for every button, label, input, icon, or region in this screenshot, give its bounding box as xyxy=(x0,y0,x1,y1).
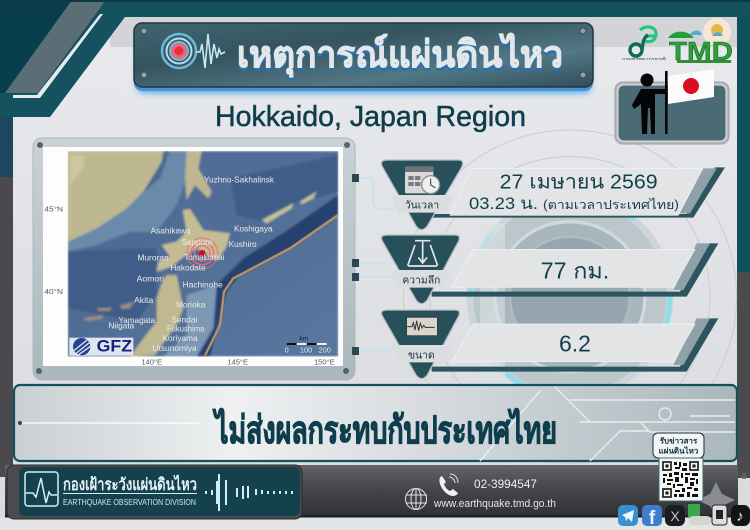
background HUD rings xyxy=(403,130,737,463)
scale bar: 200 xyxy=(319,345,331,354)
division logo xyxy=(25,472,58,506)
logo: DMR: กรมทรัพยากรธรณี xyxy=(622,56,667,61)
map image: Hachinohe xyxy=(183,279,223,289)
map image: Muroran xyxy=(137,253,169,263)
scale bar: 100 xyxy=(300,345,312,354)
website contact: www.earthquake.tmd.go.th xyxy=(433,498,556,510)
info row: date and time xyxy=(381,160,725,230)
GFZ logo: GFZ xyxy=(97,337,132,356)
logo: DMR xyxy=(622,27,667,61)
icon: Japan flag xyxy=(668,69,714,104)
map image: Morioka xyxy=(176,299,205,309)
connectors xyxy=(352,174,394,355)
map axes xyxy=(44,206,335,366)
badge xyxy=(381,310,459,379)
badge: ขนาด xyxy=(408,351,435,362)
waveform xyxy=(205,474,293,511)
icon: seismic target xyxy=(162,34,225,68)
info row: magnitude: 6.2 xyxy=(559,330,591,356)
map panel xyxy=(33,138,355,380)
social icons xyxy=(618,504,750,529)
impact banner xyxy=(14,385,737,461)
info row: depth: 77 กม. xyxy=(541,258,609,284)
phone contact: 02-3994547 xyxy=(474,477,537,491)
badge: วันเวลา xyxy=(405,200,439,212)
icon: tiktok: ♪ xyxy=(736,508,744,525)
badge xyxy=(381,235,459,304)
title plate xyxy=(134,23,593,94)
icon: line device xyxy=(688,504,711,525)
map image: Kushiro xyxy=(229,239,257,249)
info row: depth xyxy=(381,235,718,304)
info row: magnitude xyxy=(381,310,718,379)
icon: document app xyxy=(712,505,727,525)
icon: person xyxy=(632,71,668,134)
screws xyxy=(36,142,350,374)
map image: Yuzhno-Sakhalinsk xyxy=(204,174,275,184)
info row: date and time: 27 เมษายน 2569 xyxy=(500,171,658,194)
scale bar xyxy=(284,336,330,352)
map axes: 45°N xyxy=(44,206,63,214)
map image: Sendai xyxy=(171,315,197,325)
map image: Koshigaya xyxy=(234,224,273,234)
phone contact xyxy=(439,474,537,496)
logo: TMD xyxy=(668,18,733,66)
info row: date and time: 03.23 น. (ตามเวลาประเทศไทย) xyxy=(469,194,679,213)
division name: กองเฝ้าระวังแผ่นดินไหว xyxy=(63,474,197,494)
scale bar: 0 xyxy=(285,345,289,354)
map image: Niigata xyxy=(108,320,135,330)
map axes: 150°E xyxy=(314,358,335,366)
icon: telegram xyxy=(618,505,638,526)
map image: Yamagata xyxy=(118,315,155,325)
top-left corner frame xyxy=(0,0,750,117)
website contact xyxy=(406,488,556,510)
map image: Asahikawa xyxy=(151,226,191,236)
map axes: 40°N xyxy=(44,288,63,296)
map image: Akita xyxy=(134,295,154,305)
QR code xyxy=(659,458,703,501)
icon: facebook: f xyxy=(649,508,656,529)
map axes: 140°E xyxy=(141,358,162,366)
QR callout: รับข่าวสาร xyxy=(660,436,698,446)
decorative star logo xyxy=(697,482,735,518)
map image: Koriyama xyxy=(162,333,198,343)
country box: person with Japan flag xyxy=(615,69,729,144)
map image: Aomori xyxy=(137,274,164,284)
map axes: 145°E xyxy=(227,358,248,366)
map image: Hakodate xyxy=(170,262,206,272)
division plate: EARTHQUAKE OBSERVATION DIVISION xyxy=(63,497,196,507)
GFZ logo xyxy=(69,337,133,356)
map image: Utsunomiya xyxy=(153,343,197,353)
badge xyxy=(381,160,463,230)
footer bar xyxy=(5,465,747,518)
icon: X: X xyxy=(670,508,680,524)
QR callout: แผ่นดินไหว xyxy=(659,446,699,456)
logo: TMD: TMD xyxy=(669,36,733,66)
banner message: ไม่ส่งผลกระทบกับประเทศไทย xyxy=(212,408,557,452)
map image xyxy=(44,151,338,366)
map image: Sapporo xyxy=(182,237,212,247)
QR callout xyxy=(653,433,704,458)
badge: ความลึก xyxy=(402,275,440,287)
scale bar: km xyxy=(299,335,309,342)
map image: Fukushima xyxy=(167,323,204,333)
title text: เหตุการณ์แผ่นดินไหว xyxy=(237,34,563,80)
map image: Tomakomai xyxy=(184,252,224,262)
title screws xyxy=(141,28,586,78)
title plate: เหตุการณ์แผ่นดินไหว xyxy=(237,32,563,78)
subtitle: region: Hokkaido, Japan Region xyxy=(215,101,526,133)
division plate xyxy=(7,465,302,519)
